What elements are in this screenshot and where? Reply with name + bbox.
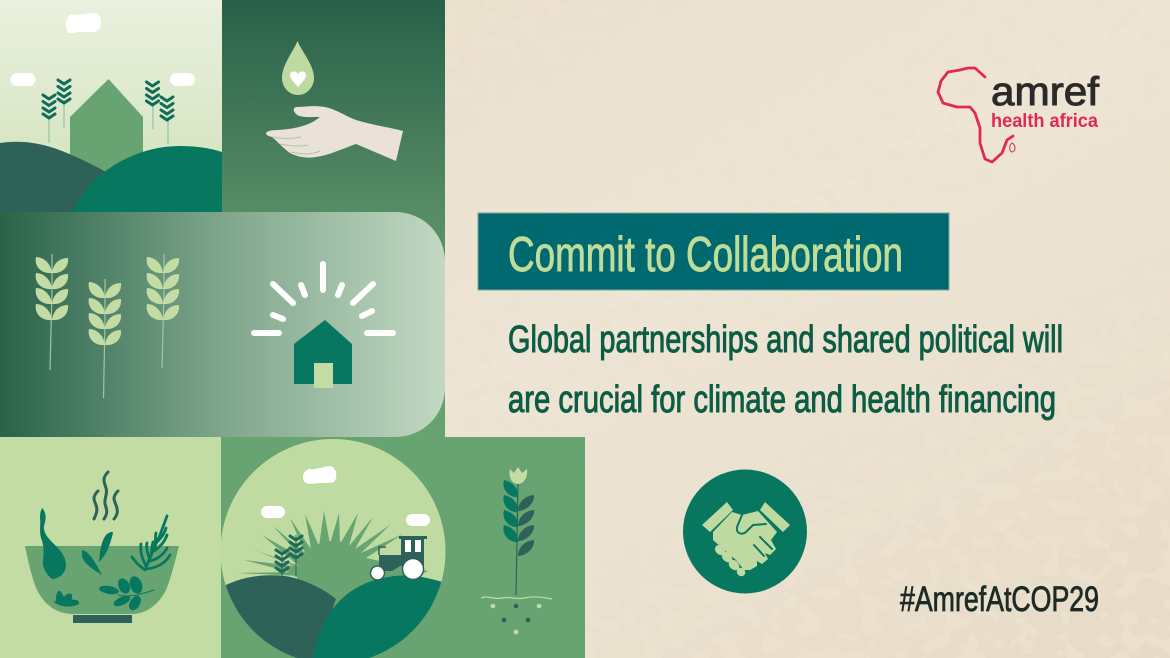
- icon: tractor: [370, 536, 427, 580]
- hill: dark left: [220, 575, 336, 658]
- icon: soil dots: [491, 604, 541, 634]
- icon: flowering plant with roots: [481, 467, 552, 634]
- panel: village scene: [0, 0, 222, 212]
- icon: soil line: [481, 597, 552, 599]
- icon: Madagascar: [1010, 143, 1015, 152]
- panel: herbal bowl: [0, 437, 221, 658]
- icon: bowl: [25, 546, 179, 614]
- logo: amref health africa: [938, 68, 1100, 162]
- panel: green backing behind band corners: [390, 212, 445, 437]
- icon: steam: [94, 472, 118, 519]
- icon: handshake badge: [683, 470, 807, 594]
- title text: Commit to Collaboration: [508, 228, 903, 282]
- icon: herbs and vegetables: [40, 508, 170, 612]
- hill: green right: [73, 146, 222, 212]
- hashtag: #AmrefAtCOP29: [900, 580, 1099, 619]
- icon: Africa outline: [938, 68, 1013, 162]
- icon: wheat plants: [36, 254, 179, 398]
- chart-like scene: farm in a circle: [220, 439, 446, 658]
- icon: house silhouette: [70, 79, 143, 180]
- panel: circular farm scene backing: [221, 437, 585, 658]
- icon: sun rays: [238, 511, 428, 613]
- title banner: [478, 213, 949, 290]
- icon: clouds: [10, 13, 195, 86]
- icon: water drop with heart: [282, 41, 314, 95]
- hill: green right: [311, 576, 446, 658]
- icon: glowing house: [254, 264, 393, 388]
- icon: open hand: [266, 106, 403, 161]
- hill: dark left: [0, 142, 106, 212]
- logo word: amref: amref: [991, 70, 1100, 114]
- icon: small wheat: [276, 535, 302, 578]
- icon: bowl base: [73, 615, 132, 623]
- panel: wheat and house band: [0, 212, 445, 437]
- logo word: health africa: health africa: [991, 111, 1098, 132]
- icon: wheat stalks: [43, 80, 173, 144]
- icon: clouds: [261, 466, 430, 526]
- panel: hand and drop: [222, 0, 445, 212]
- icon: flower bud: [509, 467, 527, 484]
- text block: description: [508, 319, 1063, 421]
